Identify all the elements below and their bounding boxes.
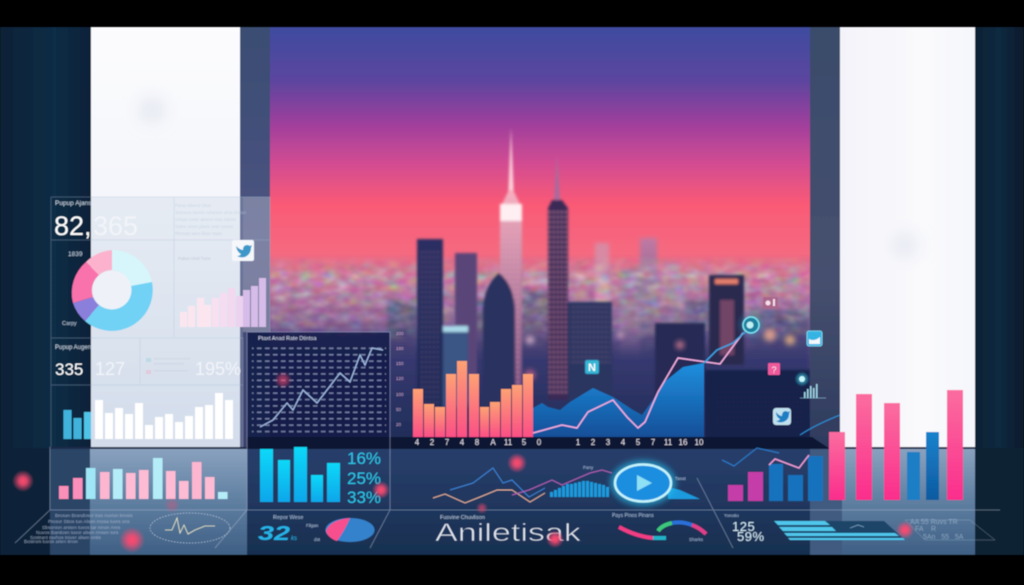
donut label top: 1839	[68, 251, 83, 258]
donut label bottom: Carpy	[62, 321, 77, 327]
icon: twitter bird	[232, 240, 254, 261]
y axis labels: 20	[396, 422, 402, 427]
red hot spot	[274, 371, 292, 389]
main towers	[417, 128, 744, 439]
stat 195%: 195%	[195, 359, 241, 379]
big metric: 365	[93, 211, 138, 241]
pale bar chart: Paket Alnd Tuns	[178, 256, 211, 261]
panel frame lines	[51, 197, 270, 447]
spire tower	[500, 128, 522, 400]
chart: mixed bars	[728, 390, 963, 501]
footer subtitle: Fusvine Chuvlison	[440, 515, 485, 521]
gauge labels: Pays Pinos Pinans	[612, 513, 654, 519]
x axis labels: 2	[430, 438, 435, 447]
dark block right	[655, 323, 705, 437]
medium tower	[455, 253, 477, 403]
icon: twitter tile	[773, 408, 791, 425]
cyan crown tower	[443, 326, 468, 407]
stat heading: Pupup Augen	[55, 345, 91, 351]
blue trend over bars	[722, 448, 779, 466]
y axis labels: 100	[396, 392, 404, 397]
icon: glow dot	[796, 373, 808, 385]
gauge caption: Sharks	[689, 537, 704, 542]
chart: rising pink line	[533, 333, 743, 433]
stat 127: 127	[95, 359, 125, 379]
x axis labels: 1	[576, 438, 581, 447]
x axis labels	[415, 438, 704, 447]
panel: dot matrix line chart	[247, 332, 390, 510]
pink trend over bars	[769, 455, 809, 468]
panel background	[247, 332, 390, 437]
left dark band	[0, 27, 91, 555]
brand title: Aniletisak	[435, 519, 582, 547]
right panel smudge	[891, 231, 919, 259]
ghost copy	[175, 203, 247, 236]
perspective copy block: Nuvos Bantiosn tuvor alsen rmsen tors	[36, 530, 119, 536]
metric 32	[258, 523, 297, 545]
striped panel	[774, 521, 905, 540]
icon: N badge: N	[588, 362, 596, 374]
x axis labels: 5	[636, 438, 641, 447]
x axis labels: 4	[415, 438, 420, 447]
y axis labels: 50	[396, 407, 402, 412]
floor ledge	[247, 437, 830, 449]
stat 335: 335	[55, 360, 83, 379]
donut chart	[72, 250, 153, 331]
x axis labels: 8	[475, 438, 480, 447]
right dark band	[975, 27, 1024, 555]
icon: chat tile	[807, 331, 822, 346]
white bar chart	[64, 393, 233, 439]
histogram	[550, 481, 700, 499]
frame	[15, 447, 1000, 548]
y axis labels	[396, 331, 404, 427]
y axis labels: 200	[396, 331, 404, 336]
perspective copy block: Sbsonion arsten tuvos tar ninon Ares	[42, 525, 121, 531]
x axis labels: 0	[537, 438, 542, 447]
x axis labels: 16	[679, 438, 688, 447]
right white panel	[840, 27, 975, 448]
chart: orange bars	[396, 331, 533, 437]
icon: target node	[740, 314, 762, 336]
percent labels: 16%	[347, 449, 381, 468]
sky gradient	[270, 27, 810, 439]
percent labels: 25%	[347, 469, 381, 488]
metric 125 / 59%	[732, 519, 765, 544]
y axis labels: 150	[396, 361, 404, 366]
chart title: Ptaxt Anad Rate Dtintsa	[258, 336, 317, 342]
line chart bottom centre	[433, 468, 612, 503]
panel: bottom left bars	[15, 447, 1000, 548]
left panel smudge	[138, 96, 166, 124]
x axis labels: 7	[651, 438, 656, 447]
panel: left dashboard	[51, 197, 270, 447]
skyline window	[270, 27, 810, 440]
report label: Repor Wese	[273, 515, 303, 521]
icon: pink tile	[768, 363, 780, 375]
dark windows glow	[715, 385, 805, 433]
pie labels: Filgan	[306, 523, 319, 528]
icon: pink tile: ?	[771, 365, 777, 375]
ghost copy: Stoneos tavnis ruhwsen aros tirstan	[175, 210, 247, 215]
chart: blue trend line	[704, 332, 745, 363]
icon: mini bars	[800, 384, 826, 398]
dark lines under white panels	[50, 447, 247, 449]
ghost copy: Sstns oroet plaris onte tuvres	[175, 224, 234, 229]
metric 125 / 59%: 125	[732, 519, 755, 534]
tint on white panel	[91, 197, 243, 447]
x axis labels: 7	[445, 438, 450, 447]
thin rising line	[800, 415, 840, 435]
metric 32: 32	[258, 523, 290, 545]
left white panel	[91, 27, 240, 448]
metric heading: Pupup Ajans	[55, 200, 92, 207]
small caption: Yonotio	[724, 513, 739, 518]
x axis labels: 4	[460, 438, 465, 447]
ghost labels: 5An 55 5A	[923, 534, 964, 541]
domed tower	[481, 272, 517, 400]
left pillar	[240, 27, 270, 448]
rising line	[260, 348, 383, 427]
icon: N badge	[585, 360, 599, 374]
gauge	[619, 522, 706, 538]
stat legend swatches	[146, 358, 190, 374]
red glow dots	[12, 453, 914, 553]
ghost labels: FA R	[915, 526, 936, 533]
play labels	[583, 465, 687, 481]
icon: photo tile	[763, 297, 778, 309]
pie chart	[326, 518, 374, 542]
perspective copy block: Sostrant ravhos tniver alsen ontis	[30, 535, 102, 541]
chart: cyan bars	[260, 447, 340, 502]
x axis labels: 11	[664, 438, 673, 447]
perspective copy block: Brosan Brandosor tras nuvion brosis	[55, 513, 133, 519]
x axis labels: 2	[591, 438, 596, 447]
metric 32: ks	[291, 536, 297, 542]
value matrix	[252, 344, 386, 434]
distant city lights	[270, 258, 810, 348]
pie labels: dst	[314, 537, 321, 542]
city light bloom	[525, 329, 795, 380]
x axis labels: 5	[522, 438, 527, 447]
twin spire tower	[548, 155, 568, 400]
translucent overlay on pillar	[243, 197, 270, 332]
lower building mass	[270, 325, 810, 440]
tall dark tower	[417, 239, 443, 439]
ghost labels: AA 55 Ruvs TR	[910, 519, 958, 526]
y axis labels: 180	[396, 346, 404, 351]
x axis labels: 4	[621, 438, 626, 447]
tall bars	[829, 432, 845, 500]
dark block centre	[566, 300, 614, 382]
dark line under right panel	[840, 447, 975, 449]
percent labels	[347, 449, 381, 507]
play labels: Tasat	[675, 476, 687, 481]
x axis labels: A	[490, 438, 496, 447]
big metric	[54, 211, 138, 241]
distant towers	[384, 236, 810, 353]
ghost labels	[905, 519, 995, 541]
play labels: Pany	[583, 465, 594, 470]
ghost copy: Rhosan aers llitos naan	[175, 231, 223, 236]
x axis labels: 11	[504, 438, 513, 447]
gold-top tower	[709, 275, 744, 365]
perspective copy block: Prosor Sttos tun Alsen rnosa tuvrs ons	[48, 519, 130, 525]
panel frame	[247, 332, 390, 510]
chart: blue area	[533, 363, 704, 437]
y axis labels: 120	[396, 376, 404, 381]
pale bar chart	[178, 256, 266, 327]
x axis labels: 10	[695, 438, 704, 447]
ghost copy: Pana Alsend Otus	[175, 203, 212, 208]
ghost copy: Vrtsas tuner alsenn tras ndorin	[175, 217, 237, 222]
video play button	[610, 460, 676, 506]
big metric: 82,	[54, 211, 92, 241]
perspective copy block: Bosinen tuvos arien tinon	[24, 539, 78, 545]
dark foreground block	[705, 370, 810, 438]
pie labels	[306, 523, 321, 542]
oval sparkline	[150, 513, 230, 543]
percent labels: 33%	[347, 488, 381, 507]
x axis labels: 3	[606, 438, 611, 447]
floor	[0, 448, 1024, 555]
metric 125 / 59%: 59%	[737, 529, 765, 544]
right pillar	[810, 27, 840, 448]
perspective copy block	[24, 513, 133, 545]
